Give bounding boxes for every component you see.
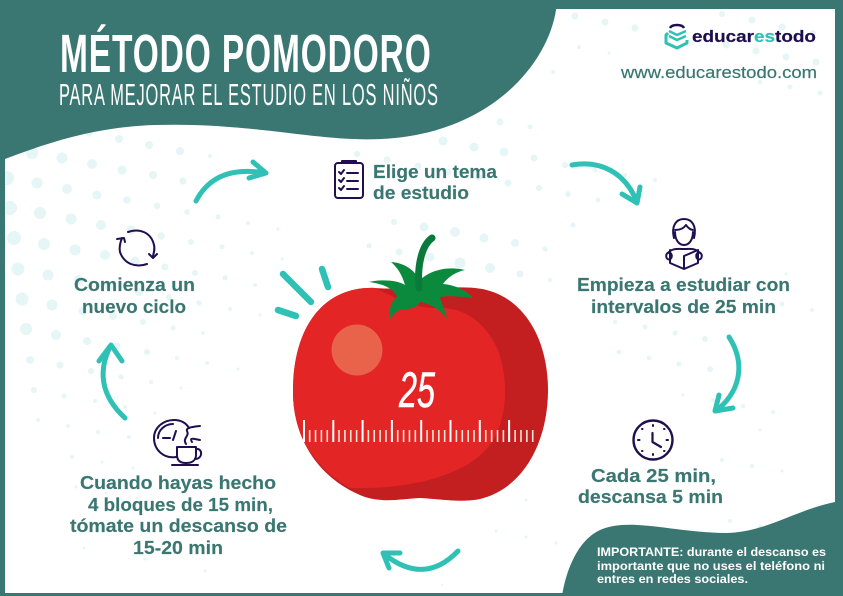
tomato light side	[293, 288, 505, 488]
icon: cycle arrows	[117, 231, 157, 266]
timer number: 25	[398, 362, 435, 418]
arrow: topic to study	[572, 164, 640, 203]
arrow: rest to long break	[383, 551, 458, 569]
step text: Cuando hayas hecho	[80, 472, 276, 493]
important notice text: entres en redes sociales.	[597, 574, 748, 586]
arrow: long break to new cycle	[99, 345, 125, 418]
title	[59, 23, 438, 112]
step: study: intervalos de 25 min	[591, 296, 776, 317]
step: choose topic: de estudio	[373, 182, 469, 203]
ruler	[303, 431, 537, 436]
burst marks	[278, 269, 328, 316]
step: study	[577, 219, 790, 317]
step: short rest	[578, 420, 723, 507]
website url: www.educarestodo.com	[620, 63, 817, 82]
step: choose topic	[335, 161, 498, 203]
important notice text: importante que no uses el teléfono ni	[597, 561, 825, 573]
icon: clipboard	[335, 161, 363, 198]
step: long break: 15-20 min	[133, 537, 223, 558]
icon: clock	[634, 420, 672, 460]
important notice panel	[562, 502, 835, 596]
logo icon	[666, 25, 687, 48]
arrow: study to rest	[715, 337, 739, 411]
step text: Empieza a estudiar con	[577, 274, 790, 295]
step: short rest: descansa 5 min	[578, 486, 723, 507]
tomato	[293, 238, 548, 501]
tomato stem	[419, 238, 432, 288]
step text: Elige un tema	[373, 161, 498, 182]
header banner	[0, 0, 558, 160]
step: long break: 4 bloques de 15 min,	[88, 494, 273, 515]
step: long break	[70, 420, 287, 558]
arrow: new cycle to topic	[196, 162, 266, 201]
step: new cycle	[74, 231, 195, 317]
logo	[666, 25, 816, 48]
step text: Cada 25 min,	[591, 465, 716, 486]
tomato body	[293, 287, 548, 501]
icon: clock and coffee	[154, 420, 201, 465]
subtitle line: PARA MEJORAR EL ESTUDIO EN LOS NIÑOS	[59, 79, 438, 112]
icon: person reading	[666, 219, 702, 269]
title line: MÉTODO POMODORO	[60, 23, 431, 84]
logo wordmark: educar estodo	[692, 27, 816, 46]
important notice text	[597, 547, 826, 586]
step text: Comienza un	[74, 274, 195, 295]
tomato leaves	[369, 262, 473, 319]
step: long break: tómate un descanso de	[70, 515, 287, 536]
step: new cycle: nuevo ciclo	[82, 296, 186, 317]
important notice text: IMPORTANTE: durante el descanso es	[597, 547, 826, 559]
tomato highlight	[332, 324, 382, 376]
